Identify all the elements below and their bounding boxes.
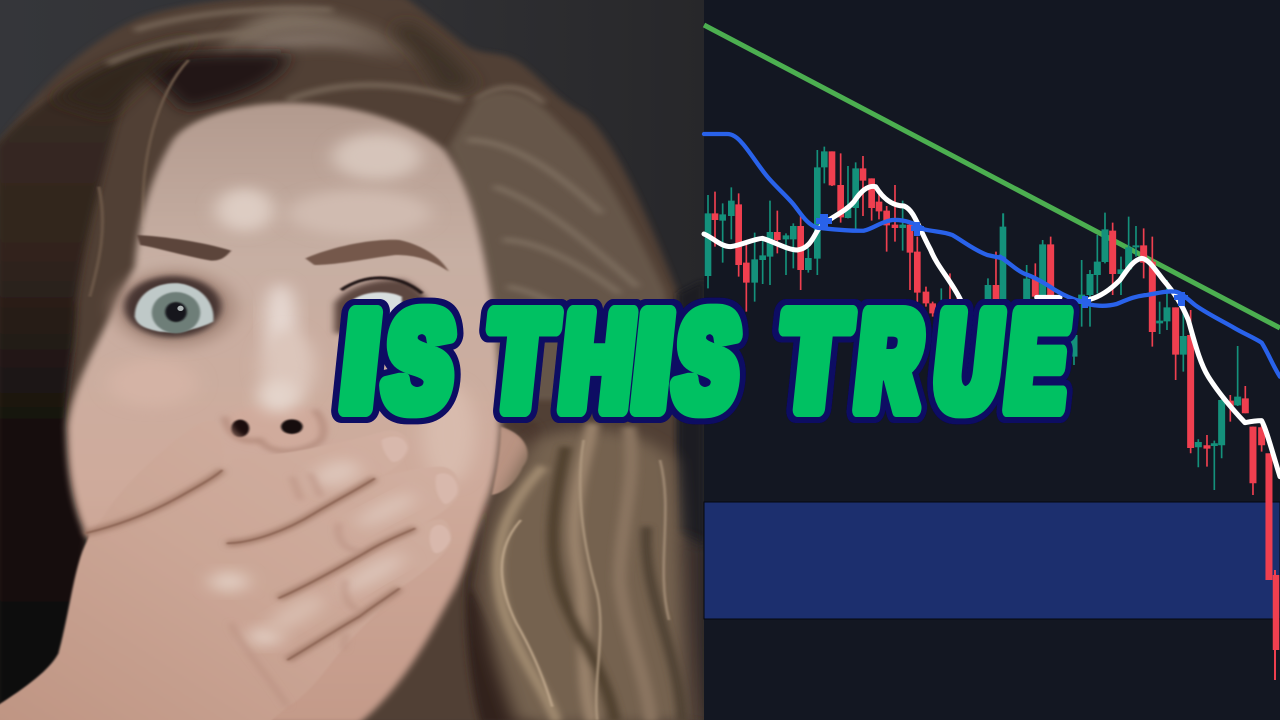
headline fill: S <box>379 284 460 439</box>
headline outline: E <box>1001 283 1074 439</box>
chart panel <box>704 0 1280 720</box>
headline outline: T <box>775 283 853 439</box>
hand shape <box>0 448 454 720</box>
lower right hair strands <box>466 423 691 720</box>
green trendline <box>704 25 1280 328</box>
headline outline: I <box>628 282 678 439</box>
teal wicks <box>708 147 1003 303</box>
eyebrow right <box>305 240 449 272</box>
white moving average <box>704 186 961 300</box>
teal wicks <box>1003 213 1238 490</box>
red bodies <box>1035 231 1269 580</box>
headline fill: I <box>628 282 678 439</box>
headline outline: T <box>482 283 559 439</box>
hair <box>0 0 704 720</box>
headline outline: S <box>669 283 745 439</box>
headline fill: I <box>337 282 384 439</box>
headline fill: E <box>1001 283 1074 439</box>
headline fill: S <box>669 283 745 439</box>
face <box>67 103 501 720</box>
chart background <box>704 0 1280 720</box>
white moving average right <box>1037 258 1280 477</box>
dark crown shadow <box>135 53 287 110</box>
moving average lines left <box>704 134 1004 300</box>
right hair lit mass <box>449 92 670 400</box>
top strands <box>108 9 543 103</box>
red wicks <box>1035 223 1262 495</box>
hand covering mouth <box>0 420 460 720</box>
eye right <box>335 278 429 333</box>
temple strands <box>90 60 189 297</box>
headline fill: U <box>929 283 1008 439</box>
finger crease shadows <box>85 470 415 660</box>
photo background <box>0 0 704 720</box>
headline fill: T <box>482 283 559 439</box>
hair fine strands <box>502 440 669 720</box>
hair lit base <box>485 429 691 720</box>
hair dark under jaw <box>462 503 528 720</box>
finger nails <box>382 437 458 553</box>
left dark hair <box>0 90 122 705</box>
crossover markers <box>816 214 1188 308</box>
headline fill: R <box>851 282 929 439</box>
face highlights <box>108 133 476 483</box>
upper left dark hair <box>54 37 198 117</box>
headline outline: U <box>929 283 1008 439</box>
knuckle folds <box>234 474 356 652</box>
demand zone band <box>704 502 1280 619</box>
headline fill: H <box>556 284 639 439</box>
nose <box>222 380 330 451</box>
finger creases <box>85 470 415 660</box>
headline fill: T <box>775 283 853 439</box>
teal bodies <box>708 151 1003 300</box>
headline outline: S <box>379 284 460 439</box>
hair soft bands <box>498 423 682 720</box>
ear <box>491 422 536 496</box>
red bodies <box>715 151 996 313</box>
headline outline <box>337 282 1074 439</box>
blue moving average <box>704 134 1004 259</box>
headline outline: R <box>851 282 929 439</box>
moving average lines right <box>1000 257 1280 477</box>
headline outline: H <box>556 284 639 439</box>
candles left section <box>708 147 1003 317</box>
candles right section <box>1003 213 1269 580</box>
far right falling candles <box>1275 570 1276 680</box>
photo: shocked woman covering mouth <box>0 0 704 720</box>
blue moving average right <box>1000 257 1280 377</box>
eye left <box>114 270 236 347</box>
crown highlight <box>218 10 406 57</box>
finger highlights <box>313 458 362 489</box>
teal bodies <box>1027 229 1238 447</box>
headline outline: I <box>337 282 384 439</box>
headline: IS THIS TRUE <box>337 282 1074 439</box>
headline fill <box>337 282 1074 439</box>
red wicks <box>715 151 996 317</box>
right edge darkness <box>678 280 704 547</box>
eyebrow left <box>137 235 231 261</box>
